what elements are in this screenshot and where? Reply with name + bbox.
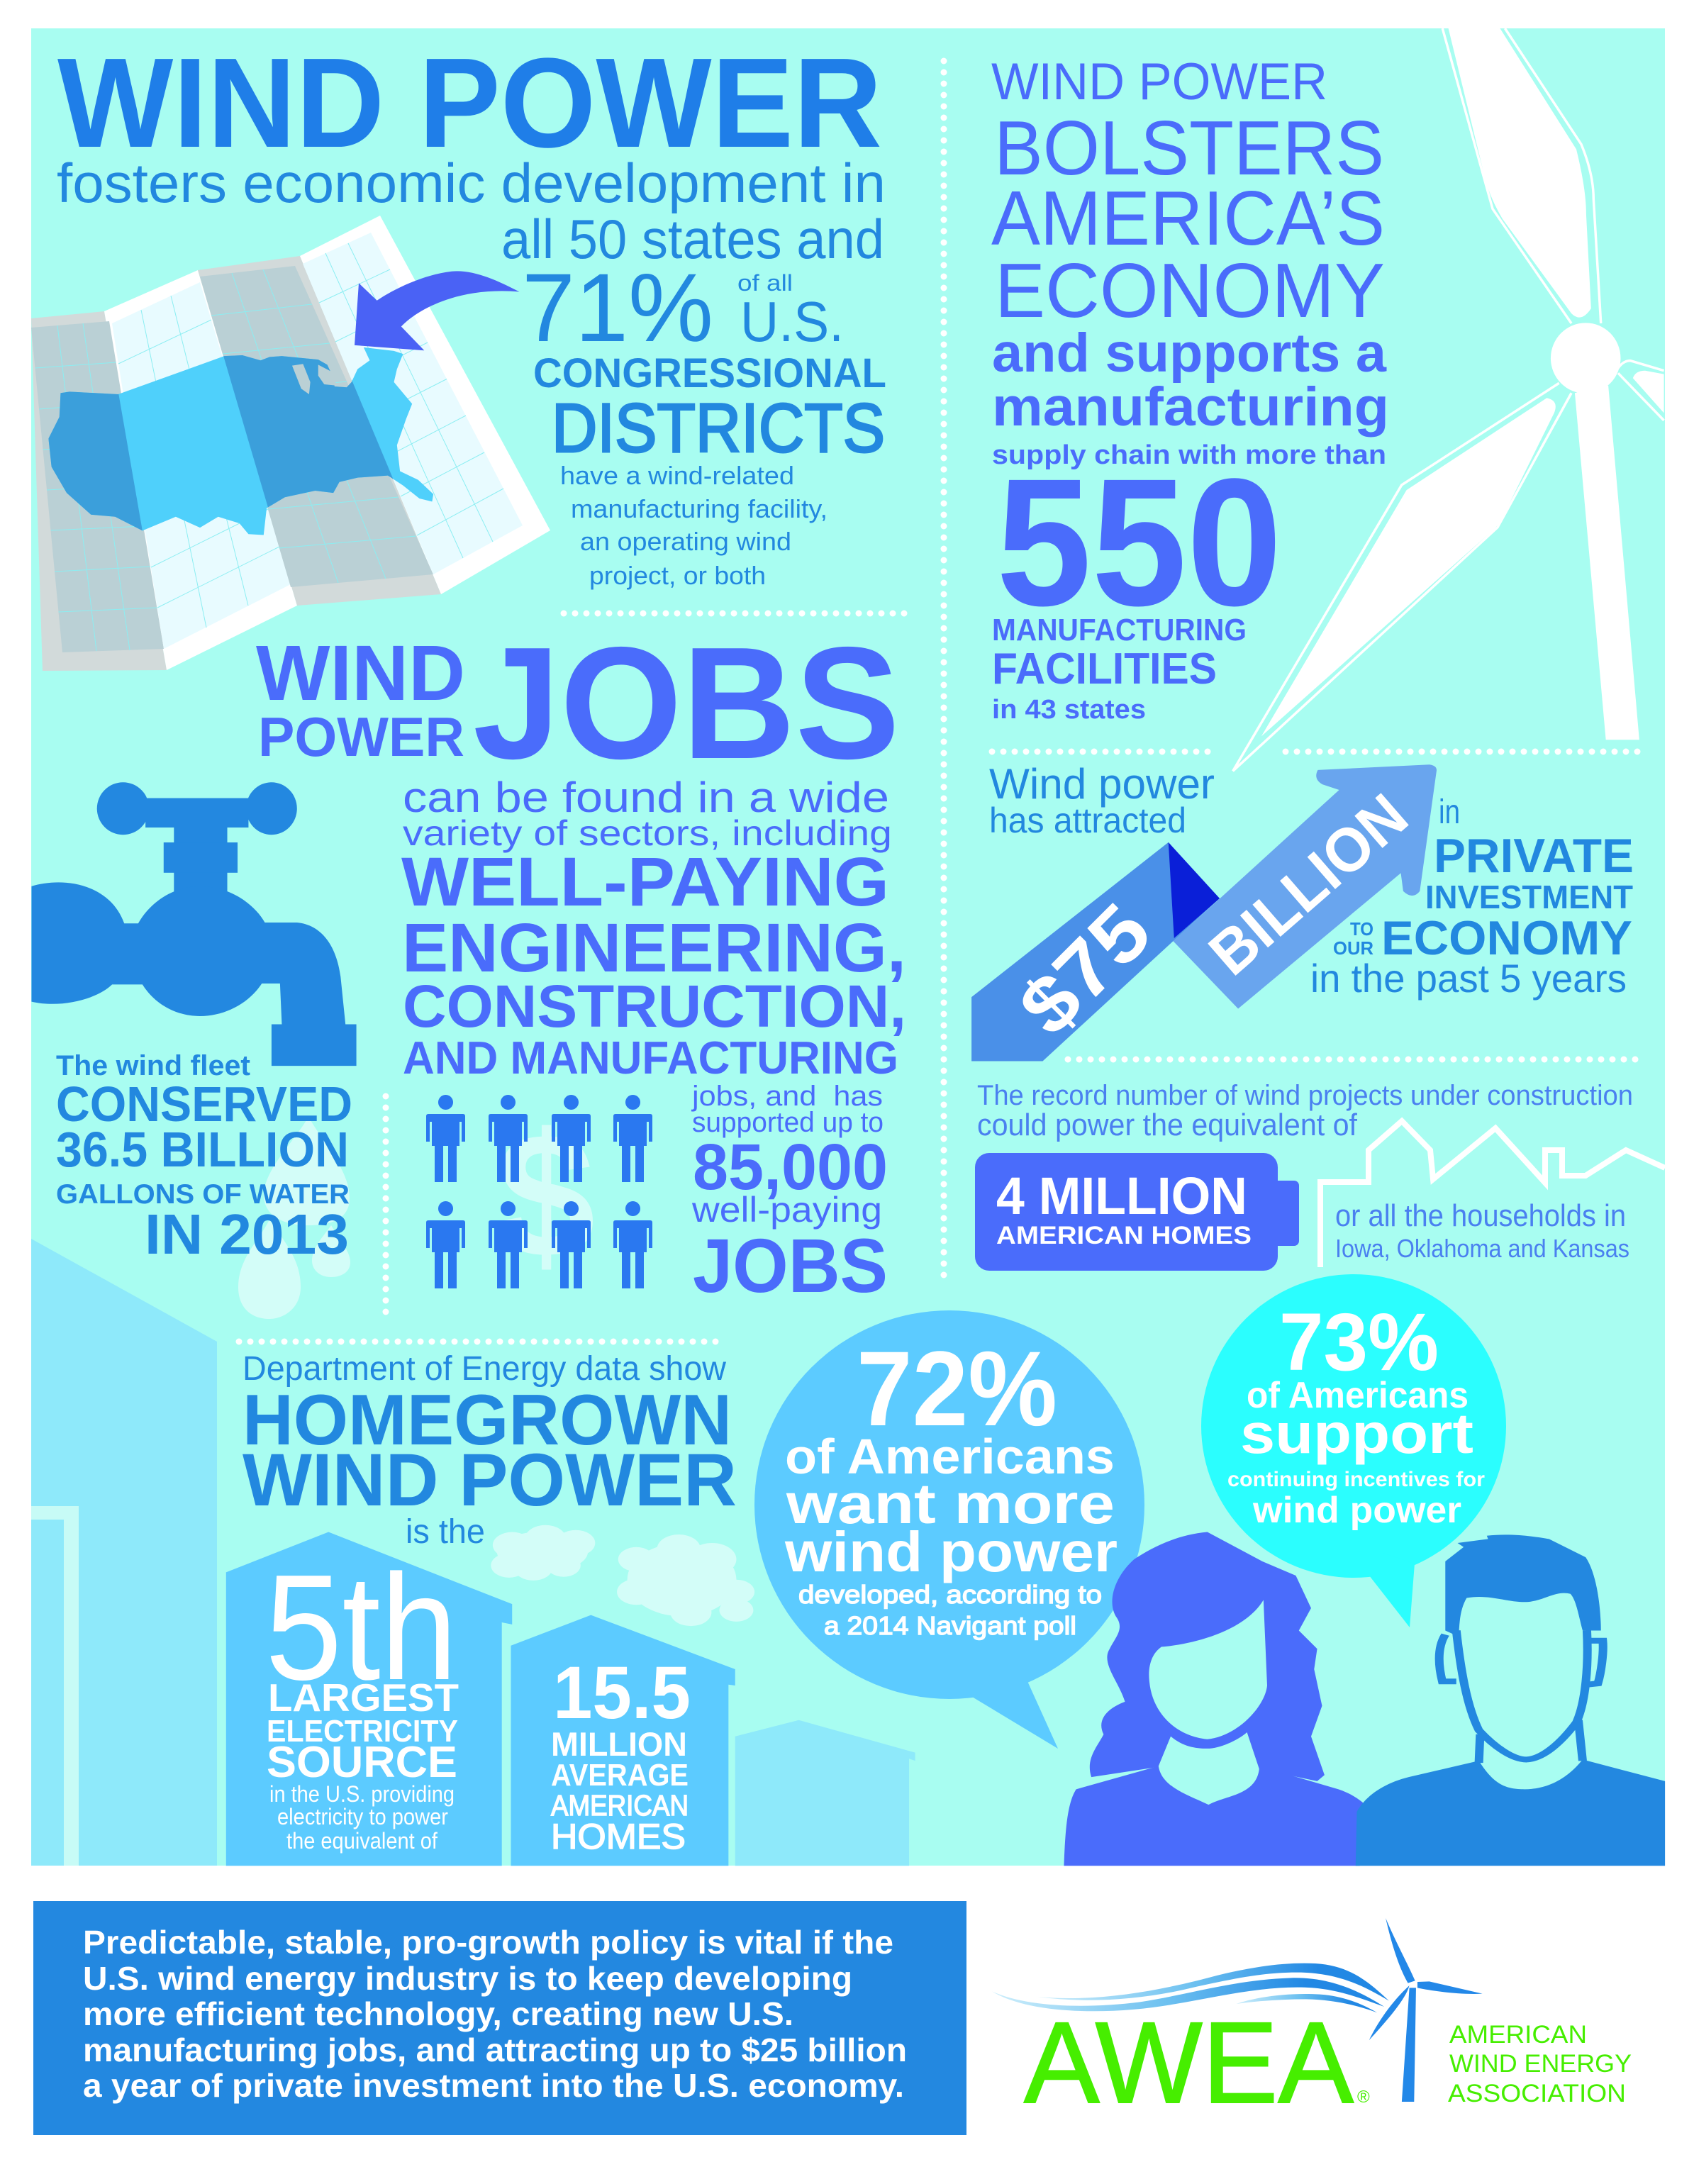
$75 billion arrow: $75 <box>1002 886 1168 1052</box>
house: 15.5 million homes: AMERICAN <box>551 1789 689 1822</box>
wind power jobs heading <box>256 613 900 792</box>
private investment text: ECONOMY <box>1381 911 1632 965</box>
wind projects text: could power the equivalent of <box>977 1108 1358 1142</box>
big house backdrop <box>31 1239 217 1866</box>
wind power jobs heading: WIND <box>256 630 465 717</box>
skyline outline <box>1320 1121 1665 1267</box>
economy heading block: manufacturing <box>992 377 1389 438</box>
85,000 jobs text: 85,000 <box>693 1131 888 1203</box>
house: 5th largest: ELECTRICITY <box>267 1714 458 1749</box>
icon: woman <box>1064 1532 1366 1866</box>
economic development text block: manufacturing facility, <box>571 494 828 523</box>
economic development text block: all 50 states and <box>501 208 884 270</box>
icon: eight workers <box>426 1095 652 1288</box>
economy heading block: and supports a <box>992 323 1387 384</box>
speech bubble: 73 percent <box>1201 1274 1506 1627</box>
policy banner: Predictable, stable, pro-growth policy is vital if the <box>83 1924 893 1961</box>
85,000 jobs text: well-paying <box>691 1190 882 1230</box>
private investment text: in the past 5 years <box>1310 956 1627 1001</box>
water conservation text: IN 2013 <box>145 1203 349 1266</box>
house: 5th largest: in the U.S. providing <box>269 1781 455 1807</box>
policy banner: a year of private investment into the U.S. economy. <box>83 2067 904 2104</box>
house: 15.5 million homes: AVERAGE <box>551 1758 689 1793</box>
homegrown heading: Department of Energy data show <box>243 1350 726 1388</box>
economy heading block: 550 <box>996 441 1282 644</box>
speech bubble: 73 percent: support <box>1240 1402 1473 1465</box>
dollar sign watermark: $ <box>496 1096 596 1294</box>
$75 billion arrow: BILLION <box>1196 781 1421 988</box>
water drops <box>238 1117 350 1319</box>
speech bubble: 73 percent: 73% <box>1279 1297 1439 1388</box>
homegrown heading: HOMEGROWN <box>243 1381 732 1460</box>
dotted dividers <box>239 61 1638 1342</box>
icon: man <box>1356 1534 1665 1866</box>
85,000 jobs text <box>691 1081 888 1308</box>
economic development text block: U.S. <box>740 290 844 353</box>
economic development text block: DISTRICTS <box>552 389 885 467</box>
speech bubble: 72 percent: developed, according to <box>798 1580 1102 1609</box>
economy heading block: FACILITIES <box>992 645 1217 693</box>
economic development text block: project, or both <box>589 561 766 590</box>
jobs sectors text: AND MANUFACTURING <box>403 1032 898 1083</box>
economy heading block: WIND POWER <box>991 53 1327 111</box>
AWEA logo: WIND ENERGY <box>1449 2050 1632 2078</box>
water conservation text: 36.5 BILLION <box>56 1122 349 1177</box>
economic development text block: fosters economic development in <box>57 152 886 214</box>
house: 15.5 million homes: HOMES <box>551 1817 686 1856</box>
house: 5th largest: electricity to power <box>277 1804 448 1829</box>
households text: Iowa, Oklahoma and Kansas <box>1335 1234 1629 1263</box>
economy heading block: BOLSTERS <box>994 105 1384 191</box>
speech bubble: 72 percent: of Americans <box>785 1429 1115 1484</box>
85,000 jobs text: JOBS <box>693 1222 888 1308</box>
wind projects text <box>977 1080 1633 1142</box>
house: 5th largest <box>226 1532 512 1866</box>
private investment text: PRIVATE <box>1434 829 1634 883</box>
battery callout: 4 million homes: 4 MILLION <box>996 1166 1247 1225</box>
households text: or all the households in <box>1335 1198 1626 1233</box>
AWEA logo: AMERICAN <box>1449 2021 1587 2049</box>
economy heading block: AMERICA’S <box>991 175 1385 262</box>
economic development text block: an operating wind <box>580 527 791 556</box>
homegrown heading <box>243 1350 737 1551</box>
wind power jobs heading: JOBS <box>473 613 900 792</box>
economy heading block <box>991 53 1389 725</box>
clouds <box>491 1525 754 1626</box>
house: 5th largest: 5th <box>265 1543 457 1711</box>
AWEA logo: AWEA <box>1024 1998 1354 2127</box>
private investment text: OUR <box>1333 937 1373 959</box>
jobs sectors text: can be found in a wide <box>403 774 889 821</box>
speech bubble: 73 percent: continuing incentives for <box>1227 1468 1485 1491</box>
investment lead text: Wind power <box>989 760 1215 808</box>
speech bubble: 72 percent: 72% <box>857 1329 1057 1448</box>
wind projects text: The record number of wind projects under construction <box>977 1080 1633 1111</box>
jobs sectors text: variety of sectors, including <box>403 813 892 853</box>
speech bubble: 72 percent <box>754 1310 1144 1749</box>
house: 15.5 million homes <box>511 1615 735 1866</box>
speech bubble: 72 percent: a 2014 Navigant poll <box>824 1611 1076 1640</box>
house: 5th largest: SOURCE <box>267 1738 457 1787</box>
battery callout: 4 million homes <box>975 1153 1299 1271</box>
economic development text block <box>57 152 886 590</box>
water conservation text: GALLONS OF WATER <box>56 1179 350 1210</box>
private investment text: in <box>1439 793 1460 831</box>
AWEA logo <box>992 1918 1632 2127</box>
speech bubble: 73 percent: wind power <box>1252 1490 1461 1531</box>
private investment text: TO <box>1350 918 1373 940</box>
economy heading block: supply chain with more than <box>992 440 1386 470</box>
AWEA logo: ® <box>1357 2088 1370 2107</box>
economic development text block: of all <box>737 270 793 296</box>
house: 15.5 million homes: MILLION <box>551 1725 687 1763</box>
policy banner <box>33 1901 966 2135</box>
folded US map <box>0 216 550 671</box>
economy heading block: MANUFACTURING <box>992 613 1247 647</box>
investment lead text <box>989 760 1215 840</box>
policy banner: more efficient technology, creating new U.S. <box>83 1995 793 2032</box>
homegrown heading: is the <box>406 1513 485 1551</box>
jobs sectors text: ENGINEERING, <box>402 909 906 986</box>
policy banner: U.S. wind energy industry is to keep developing <box>83 1960 852 1997</box>
icon: faucet <box>31 782 357 1066</box>
economy heading block: ECONOMY <box>995 247 1385 334</box>
wind power jobs heading: POWER <box>258 706 464 768</box>
economic development text block: 71% <box>522 254 713 362</box>
economic development text block: CONGRESSIONAL <box>533 350 886 396</box>
households text <box>1335 1198 1629 1263</box>
85,000 jobs text: jobs, and has <box>691 1081 883 1112</box>
jobs sectors text: WELL-PAYING <box>401 843 889 920</box>
house: 15.5 million homes: 15.5 <box>553 1651 691 1734</box>
arrow pointing to the map <box>355 271 519 350</box>
policy banner: manufacturing jobs, and attracting up to $25 billion <box>83 2032 907 2068</box>
water conservation text: The wind fleet <box>56 1050 250 1081</box>
water conservation text: CONSERVED <box>56 1076 352 1132</box>
faint small house <box>735 1720 915 1866</box>
AWEA logo: ASSOCIATION <box>1448 2080 1626 2107</box>
private investment text: INVESTMENT <box>1425 879 1633 915</box>
main title: WIND POWER <box>57 32 882 174</box>
speech bubble: 72 percent: want more <box>786 1472 1115 1535</box>
speech bubble: 73 percent: of Americans <box>1247 1375 1469 1416</box>
jobs sectors text <box>401 774 906 1083</box>
homegrown heading: WIND POWER <box>243 1439 737 1522</box>
private investment text <box>1310 793 1634 1001</box>
wind turbine illustration <box>1233 28 1664 771</box>
$75 billion arrow <box>971 764 1437 1061</box>
investment lead text: has attracted <box>989 801 1186 840</box>
house: 5th largest: LARGEST <box>268 1676 459 1720</box>
battery callout: 4 million homes: AMERICAN HOMES <box>996 1222 1252 1249</box>
85,000 jobs text: supported up to <box>692 1107 884 1138</box>
jobs sectors text: CONSTRUCTION, <box>403 973 906 1040</box>
speech bubble: 72 percent: wind power <box>784 1520 1118 1583</box>
house: 5th largest: the equivalent of <box>286 1828 438 1854</box>
economic development text block: have a wind-related <box>560 461 794 490</box>
water conservation text <box>56 1050 352 1266</box>
economy heading block: in 43 states <box>992 695 1146 725</box>
